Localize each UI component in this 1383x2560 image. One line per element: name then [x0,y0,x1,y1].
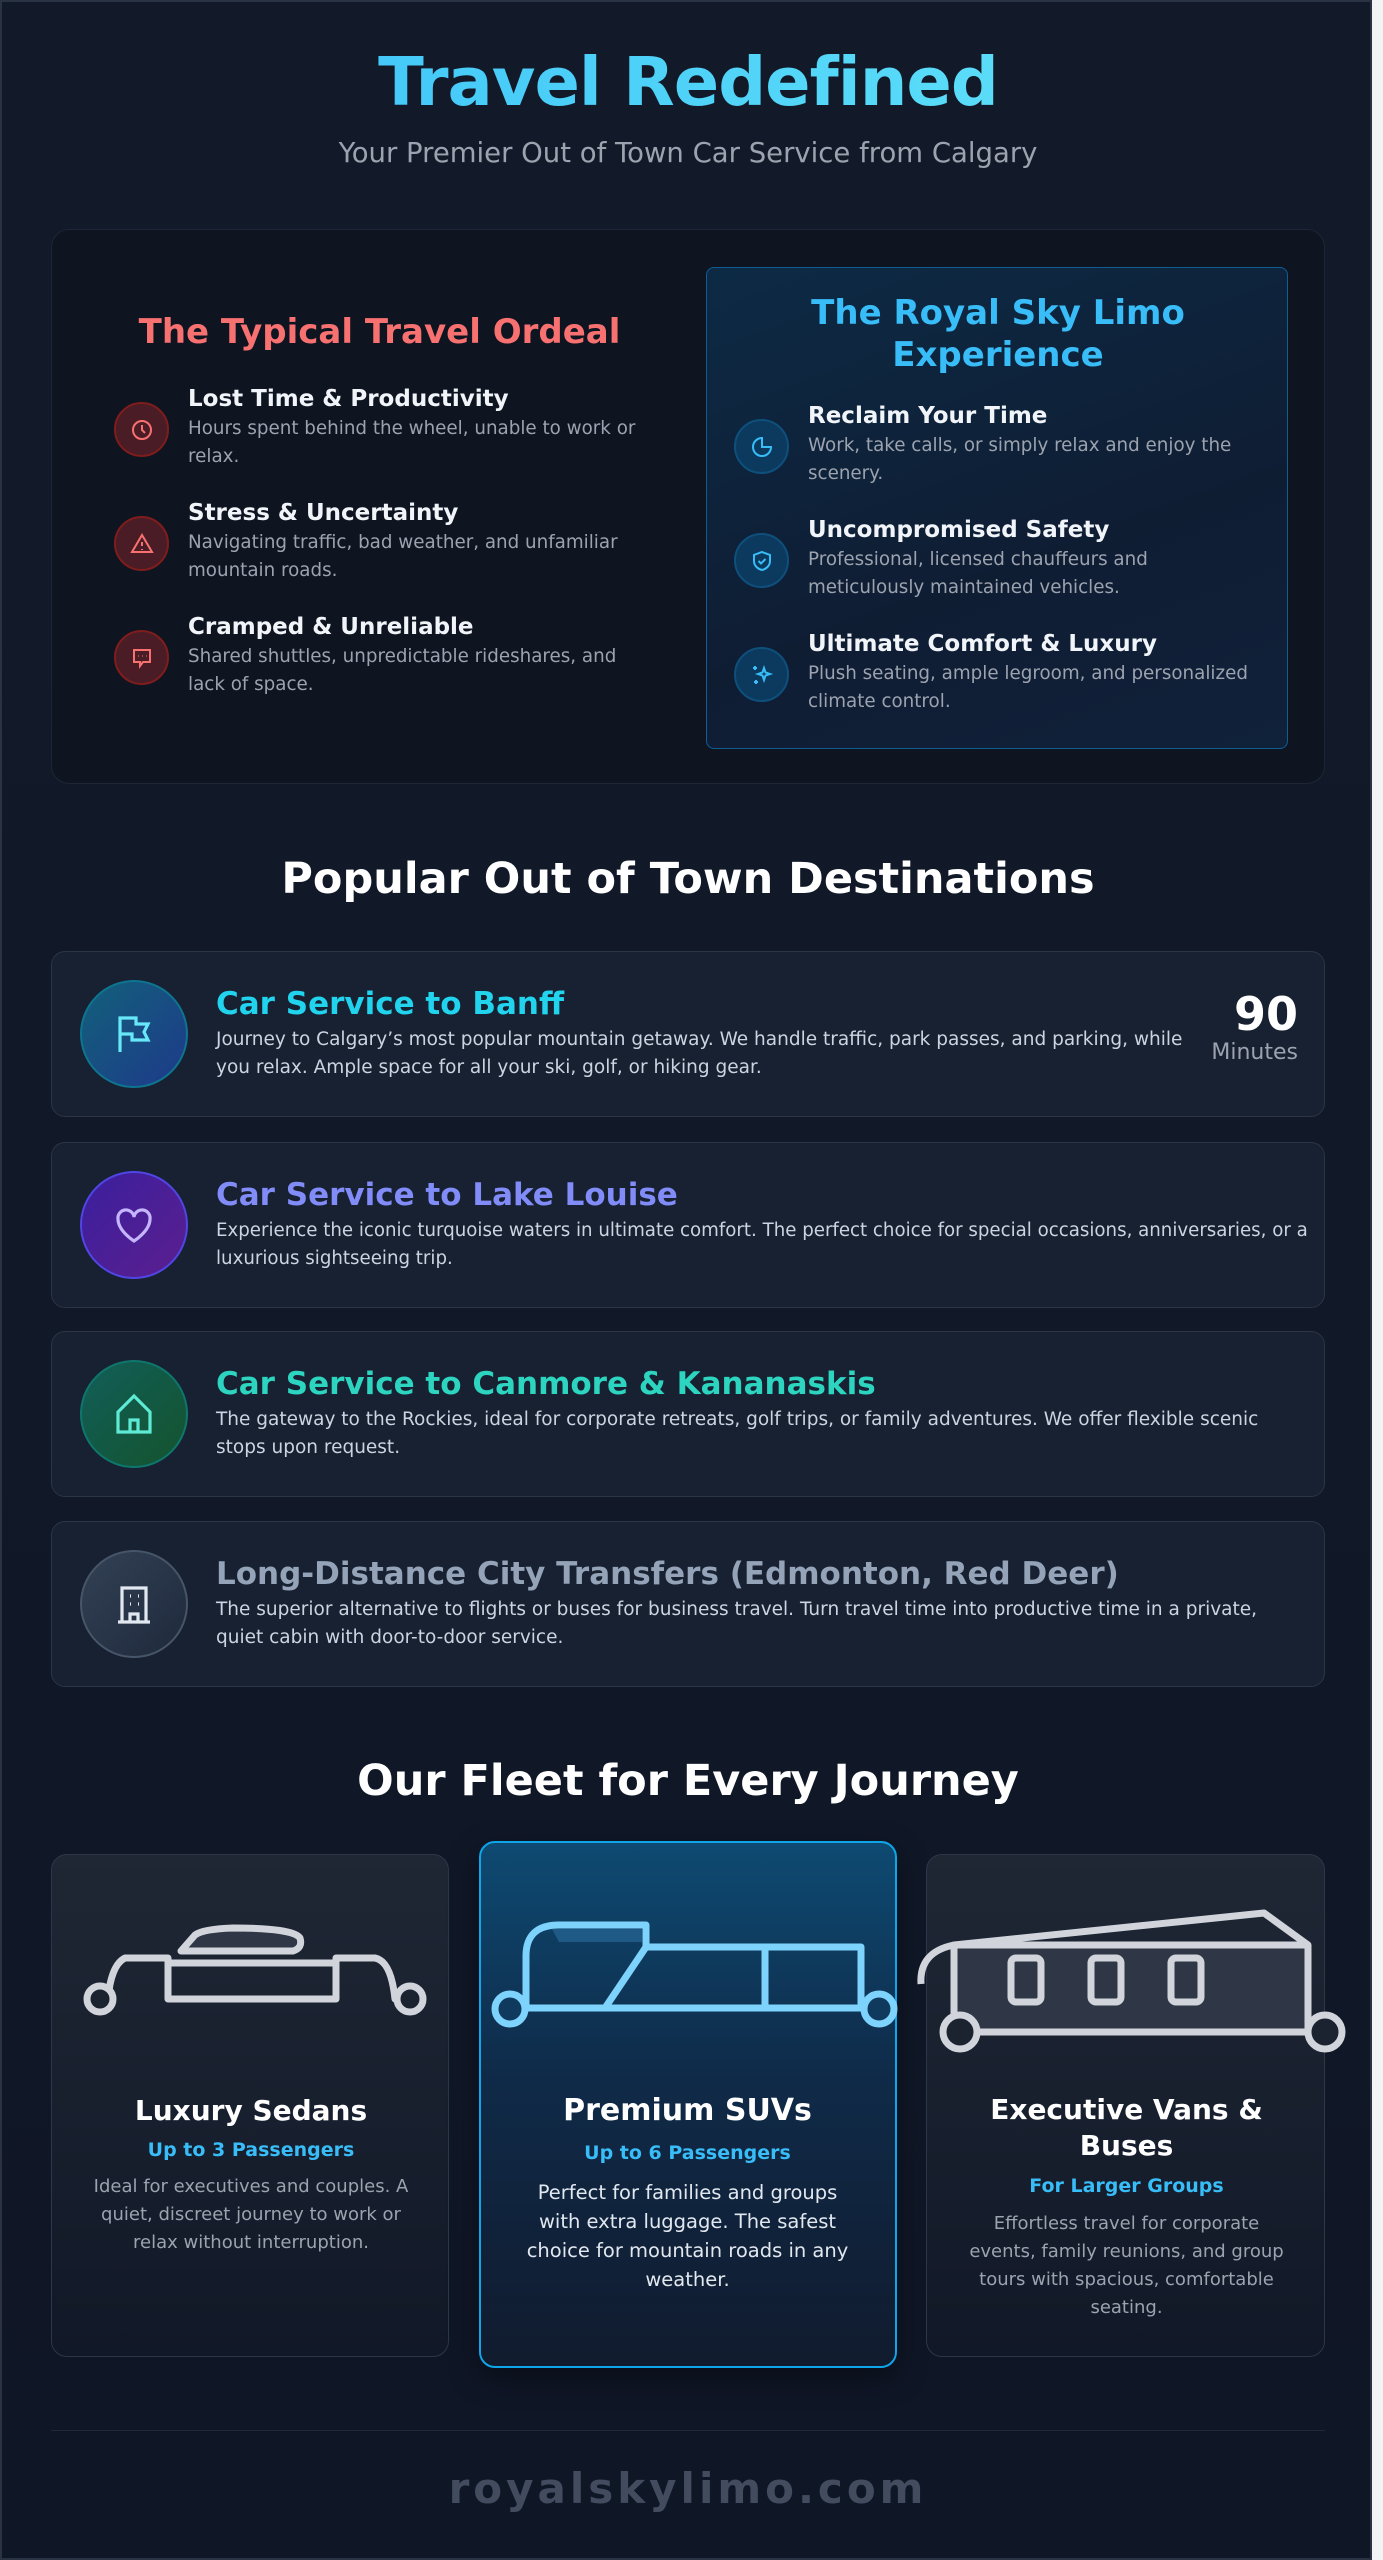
item: lost time: Hours spent behind the wheel, unable to work or relax. [188,418,635,467]
card: premium suvs [479,1841,897,2368]
icon: suv [492,1922,898,2028]
icon: van [917,1910,1346,2052]
card: long distance: The superior alternative to flights or buses for business travel. Turn travel time into productive time in a private, quiet cabin with door-to-door service. [216,1599,1257,1648]
card: canmore: The gateway to the Rockies, ideal for corporate retreats, golf trips, or family adventures. We offer flexible scenic stops upon request. [216,1409,1258,1458]
icon: sedan [84,1924,426,2016]
icon: flag [80,980,188,1088]
item: reclaim time: Reclaim Your Time [808,403,1047,429]
stat: 90 minutes [1211,987,1298,1065]
icon: message [114,630,169,685]
card: canmore: Car Service to Canmore & Kananaskis [216,1366,876,1402]
footer: website: royalskylimo.com [449,2464,927,2513]
card: banff: Car Service to Banff [216,986,564,1022]
heading: experience: Experience [892,335,1104,375]
heading: experience [811,293,1185,375]
card: lake louise: Car Service to Lake Louise [216,1177,678,1213]
card: vans & buses: Effortless travel for corporate events, family reunions, and group tours with spacious, comfortable seating. [969,2213,1284,2318]
item: stress: Navigating traffic, bad weather, and unfamiliar mountain roads. [188,532,618,581]
heading: typical ordeal: The Typical Travel Ordeal [139,312,620,352]
icon: house [80,1360,188,1468]
card: lake louise: Experience the iconic turquoise waters in ultimate comfort. The perfect choice for special occasions, anniversaries, or a luxurious sightseeing trip. [216,1220,1308,1269]
card: premium suvs: Up to 6 Passengers [584,2142,791,2164]
card: vans & buses: For Larger Groups [1029,2175,1224,2197]
card: vans & buses: Executive Vans & Buses [990,2093,1263,2162]
item: lost time: Lost Time & Productivity [188,386,509,412]
item: stress [114,500,618,581]
icon: clock [114,402,169,457]
card: lake louise [51,1142,1325,1308]
stat: 90 minutes: 90 [1234,987,1298,1041]
card: premium suvs: Premium SUVs [563,2093,812,2128]
card: banff [51,951,1325,1117]
card: vans & buses [926,1854,1325,2357]
panel: comparison [51,229,1325,784]
item: comfort: Ultimate Comfort & Luxury [808,631,1157,657]
heading: destinations: Popular Out of Town Destinations [281,854,1095,904]
item: comfort: Plush seating, ample legroom, and personalized climate control. [808,663,1248,712]
card: luxury sedans: Luxury Sedans [135,2094,367,2127]
item: comfort [734,631,1248,712]
icon: shield [734,533,789,588]
icon: pie [734,419,789,474]
card: luxury sedans [51,1854,449,2357]
card: banff: Journey to Calgary’s most popular mountain getaway. We handle traffic, park passes, and parking, while you relax. Ample space for all your ski, golf, or hiking gear. [216,1029,1182,1078]
title [2,40,1374,124]
icon: warning [114,516,169,571]
card: long distance: Long-Distance City Transfers (Edmonton, Red Deer) [216,1556,1119,1592]
item: lost time [114,386,636,467]
item: stress: Stress & Uncertainty [188,500,458,526]
item: safety: Uncompromised Safety [808,517,1109,543]
item: safety [734,517,1148,598]
card: luxury sedans: Ideal for executives and couples. A quiet, discreet journey to work or relax without interruption. [94,2176,408,2253]
icon: sparkles [734,647,789,702]
icon: building [80,1550,188,1658]
card: luxury sedans: Up to 3 Passengers [148,2139,354,2161]
item: cramped: Cramped & Unreliable [188,614,474,640]
item: cramped [114,614,616,695]
item: reclaim time [734,403,1231,484]
card: premium suvs: Perfect for families and groups with extra luggage. The safest choice for mountain roads in any weather. [527,2181,848,2291]
card: long distance [51,1521,1325,1687]
item: reclaim time: Work, take calls, or simply relax and enjoy the scenery. [808,435,1231,484]
heading: experience: The Royal Sky Limo [811,293,1185,333]
panel: royal sky experience [706,267,1288,749]
icon: heart [80,1171,188,1279]
item: safety: Professional, licensed chauffeurs and meticulously maintained vehicles. [808,549,1148,598]
item: cramped: Shared shuttles, unpredictable rideshares, and lack of space. [188,646,616,695]
title: Travel Redefined [378,43,998,121]
card: canmore [51,1331,1325,1497]
heading: fleet: Our Fleet for Every Journey [357,1756,1019,1806]
subtitle: Your Premier Out of Town Car Service from Calgary [339,137,1037,169]
stat: 90 minutes: Minutes [1211,1040,1298,1065]
